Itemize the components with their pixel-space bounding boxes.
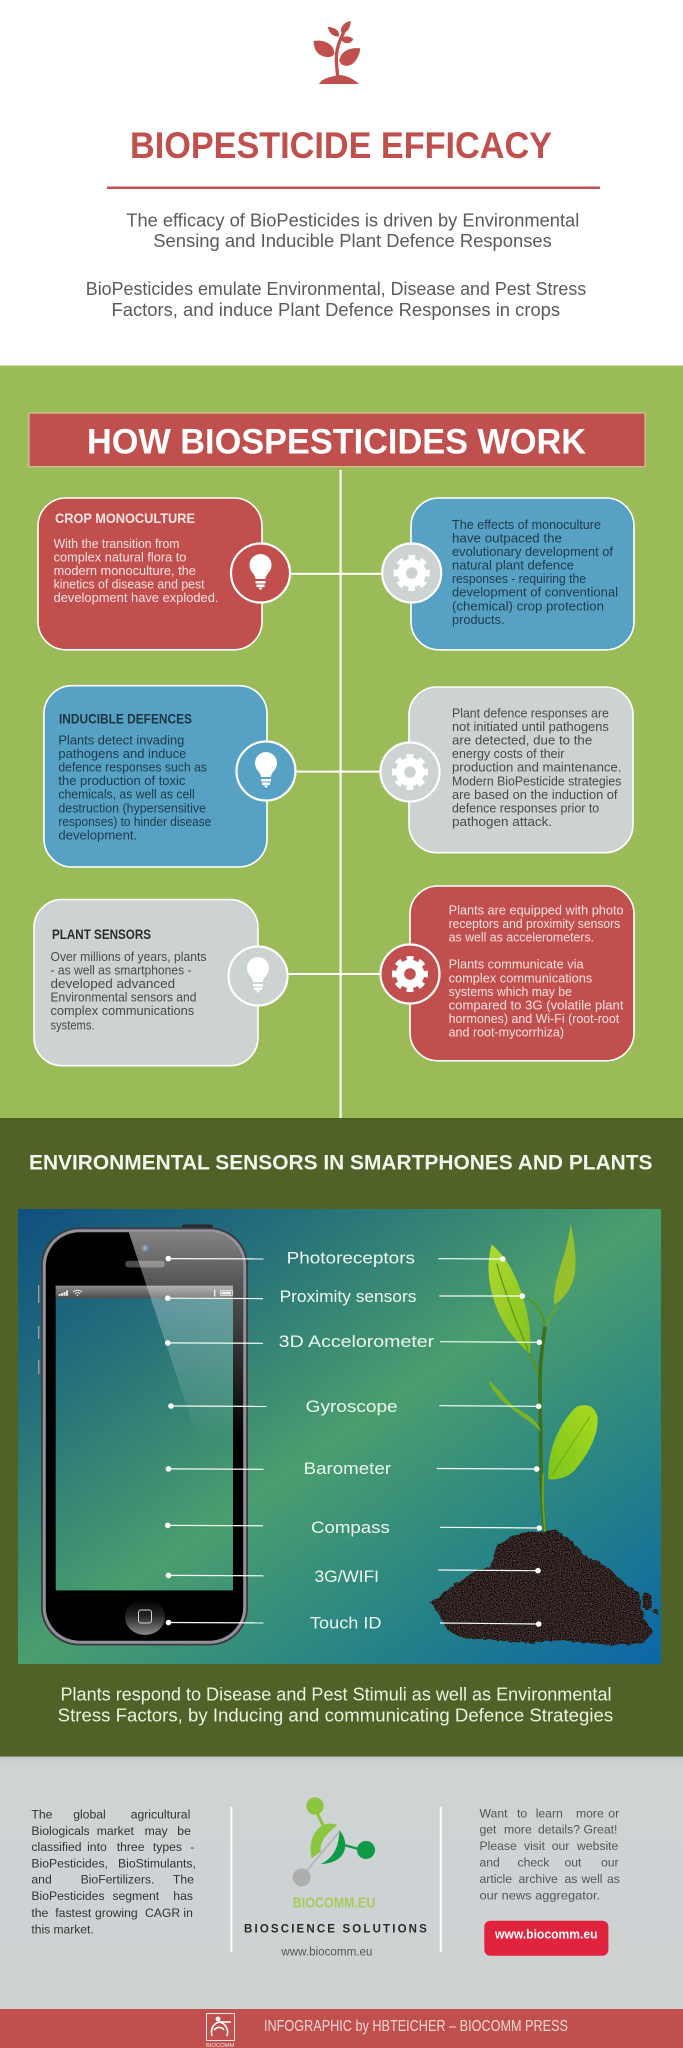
body text: kinetics of disease and pest [54, 578, 205, 592]
text block: call to action: well [580, 1872, 602, 1886]
card: plant defence responses: Modern BioPesticide strategies [452, 775, 621, 789]
text block: call to action: as [564, 1872, 577, 1886]
page background [0, 0, 683, 366]
smartphone illustration [38, 1224, 250, 1646]
body text: chemicals, as well as cell [58, 787, 195, 801]
panel: how biopesticides work [0, 366, 683, 1118]
icon: bulb on blue circle [236, 742, 296, 800]
card: crop monoculture [38, 498, 262, 650]
sensor leader lines: plant side [437, 1256, 542, 1627]
plant illustration [430, 1224, 658, 1645]
sensor labels [279, 1249, 435, 1633]
card: plant defence responses: production and maintenance. [452, 760, 621, 774]
intro text block [86, 210, 586, 320]
card: monoculture effects: development of conventional [452, 586, 618, 600]
text block: market: BioPesticides [31, 1889, 105, 1903]
body text: developed advanced [50, 977, 175, 991]
logo wordmark: BIOCOMM.EU [293, 1894, 375, 1911]
card: monoculture effects: evolutionary development of [452, 545, 614, 559]
text block: market: The [31, 1807, 53, 1821]
body text: complex natural flora to [54, 551, 186, 565]
text block: call to action: article [480, 1872, 512, 1886]
text block: call to action: learn [536, 1806, 563, 1820]
intro text block: Sensing and Inducible Plant Defence Responses [153, 231, 552, 251]
text block: call to action: more [504, 1823, 532, 1837]
logo: biocomm [293, 1797, 375, 1886]
title: BIOPESTICIDE EFFICACY [130, 125, 552, 166]
body text: modern monoculture, the [54, 564, 196, 578]
text block: call to action: check [518, 1856, 550, 1870]
caption: Stress Factors, by Inducing and communicating Defence Strategies [58, 1706, 613, 1726]
sensor labels: Touch ID [310, 1614, 382, 1633]
card: monoculture effects: have outpaced the [452, 531, 562, 545]
sensor leader lines: smartphone side [165, 1256, 266, 1625]
text block: call to action: more [576, 1806, 604, 1820]
banner: HOW BIOSPESTICIDES WORK [87, 422, 586, 461]
card: plant defence responses: Plant defence responses are [452, 707, 609, 721]
soil mound [430, 1530, 658, 1645]
card: monoculture effects: (chemical) crop protection [452, 600, 604, 614]
sensor labels: Barometer [304, 1459, 391, 1478]
website: www.biocomm.eu [280, 1946, 372, 1958]
text block: market: fastest [55, 1906, 92, 1920]
card: monoculture effects: The effects of monoculture [452, 518, 601, 532]
body text: Plants detect invading [58, 734, 184, 748]
text block: call to action: out [564, 1856, 582, 1870]
heading: crop monoculture: CROP MONOCULTURE [55, 510, 195, 526]
sensor labels: 3G/WIFI [314, 1567, 379, 1586]
body text: development have exploded. [54, 591, 218, 605]
text block: market: may [145, 1824, 169, 1838]
text block: market: has [173, 1889, 193, 1903]
card: monoculture effects [411, 498, 634, 650]
caption: Plants respond to Disease and Pest Stimuli as well as Environmental [60, 1685, 612, 1705]
text block: call to action: our [601, 1856, 619, 1870]
icon: gear on grey circle [380, 742, 440, 802]
speaker [125, 1261, 165, 1268]
panel: environmental sensors [0, 1118, 683, 1757]
body text: destruction (hypersensitive [58, 802, 206, 816]
tagline: BIOSCIENCE SOLUTIONS [244, 1923, 427, 1935]
card: plant communication: hormones) and Wi-Fi (root-root [449, 1012, 620, 1026]
leaf top left [489, 1244, 530, 1353]
card: plant defence responses [409, 687, 633, 853]
card: plant defence responses: are detected, due to the [452, 734, 592, 748]
body text [54, 537, 218, 605]
card: plant defence responses: defence responses prior to [452, 802, 599, 816]
body text: - as well as smartphones - [50, 964, 192, 978]
text block: call to action: website [576, 1839, 619, 1853]
body text: complex communications [50, 1004, 194, 1018]
body text: defence responses such as [58, 760, 207, 774]
text block: call to action: Please [480, 1839, 517, 1853]
card: plant sensors [34, 900, 258, 1066]
card: inducible defences [44, 686, 267, 867]
text block: call to action: as [607, 1872, 620, 1886]
phone screen [56, 1286, 233, 1590]
text block: call to action: to [517, 1806, 527, 1820]
card: plant communication: as well as accelerometers. [449, 931, 594, 945]
gradient image panel [18, 1209, 661, 1664]
text block: market: three [117, 1840, 145, 1854]
screen gloss [128, 1232, 244, 1424]
intro text block: Factors, and induce Plant Defence Responses in crops [112, 300, 560, 320]
card: monoculture effects: responses - requiring the [452, 572, 586, 586]
icon: seedling [314, 21, 360, 84]
card: plant communication: and root-mycorrhiza) [449, 1026, 564, 1040]
section heading: ENVIRONMENTAL SENSORS IN SMARTPHONES AND PLANTS [29, 1150, 652, 1174]
text block: market: market [97, 1824, 135, 1838]
card: plant defence responses: not initiated until pathogens [452, 720, 609, 734]
body text: Environmental sensors and [50, 991, 196, 1005]
body text: responses) to hinder disease [58, 815, 211, 829]
text block: market: Biologicals [31, 1824, 90, 1838]
text block: market: types [153, 1840, 182, 1854]
icon: bulb on grey circle [228, 946, 288, 1006]
text block: call to action: our news aggregator. [480, 1888, 600, 1902]
body text: pathogens and induce [58, 747, 186, 761]
status bar [56, 1286, 233, 1298]
text block: market: The [173, 1873, 194, 1887]
text block: market: and [31, 1873, 52, 1887]
card: plant communication: receptors and proximity sensors [449, 917, 620, 931]
sensor labels: Proximity sensors [280, 1287, 416, 1306]
text block: call to action: archive [518, 1872, 558, 1886]
text block: market: BioStimulants, [118, 1856, 196, 1870]
icon: gear on red circle [380, 944, 440, 1004]
body text: systems. [50, 1018, 94, 1032]
sensor labels: Compass [311, 1518, 390, 1537]
card: monoculture effects: products. [452, 613, 504, 627]
banner [29, 413, 645, 467]
home button [125, 1599, 165, 1635]
text block: market: growing [95, 1906, 138, 1920]
text block: market [31, 1807, 196, 1936]
body text: With the transition from [54, 537, 180, 551]
text block: market: this market. [31, 1922, 94, 1936]
text block: market: into [87, 1840, 107, 1854]
leaf top right [554, 1224, 576, 1305]
icon: bulb on red circle [231, 544, 290, 602]
body text: the production of toxic [58, 774, 185, 788]
text block: market: classified [31, 1840, 82, 1854]
text block: call to action: our [552, 1839, 569, 1853]
card: plant defence responses: are based on the induction of [452, 788, 618, 802]
button: website: www.biocomm.eu [494, 1926, 598, 1941]
text block: market: global [73, 1807, 106, 1821]
card: plant communication: compared to 3G (volatile plant [449, 998, 624, 1012]
text block: market: be [177, 1824, 191, 1838]
text block: call to action: get [480, 1823, 497, 1837]
text block: market: BioFertilizers. [81, 1873, 154, 1887]
intro text block: BioPesticides emulate Environmental, Disease and Pest Stress [86, 279, 586, 299]
button: website [484, 1921, 608, 1956]
text block: market: the [31, 1906, 49, 1920]
text block: market: agricultural [131, 1807, 190, 1821]
leaf lower right [548, 1405, 598, 1479]
stem [540, 1327, 545, 1532]
card: monoculture effects: natural plant defence [452, 558, 574, 572]
footer logo [206, 2014, 235, 2048]
title underline [107, 186, 600, 189]
body text: development. [58, 829, 137, 843]
text block: market: segment [112, 1889, 160, 1903]
panel: about biocomm [0, 1757, 683, 2009]
camera [141, 1245, 149, 1252]
heading: plant sensors: PLANT SENSORS [52, 926, 151, 942]
body text: Over millions of years, plants [50, 950, 206, 964]
text block: call to action [480, 1806, 620, 1902]
card: plant communication: Plants are equipped with photo [449, 904, 624, 918]
heading: inducible defences: INDUCIBLE DEFENCES [59, 710, 192, 726]
text block: market: in [183, 1906, 193, 1920]
text block: call to action: or [608, 1806, 619, 1820]
footer [0, 2009, 683, 2048]
leaf small left [488, 1381, 541, 1432]
text block: market: BioPesticides, [31, 1856, 108, 1870]
text block: market: - [190, 1840, 194, 1854]
text block: call to action: Great! [584, 1823, 617, 1837]
sensor labels: Photoreceptors [287, 1249, 415, 1268]
card: plant communication: systems which may be [449, 985, 572, 999]
icon: gear on grey circle [382, 544, 441, 602]
card: plant defence responses: energy costs of their [452, 747, 564, 761]
caption [58, 1685, 613, 1726]
text block: call to action: details? [538, 1823, 580, 1837]
sensor labels: 3D Accelorometer [279, 1332, 435, 1351]
body text [50, 950, 206, 1032]
card: plant communication: Plants communicate via [449, 958, 584, 972]
footer credit: INFOGRAPHIC by HBTEICHER – BIOCOMM PRESS [264, 2018, 568, 2035]
sensor labels: Gyroscope [306, 1397, 398, 1416]
card: plant defence responses: pathogen attack. [452, 815, 552, 829]
text block: call to action: Want [480, 1806, 508, 1820]
body text [58, 734, 211, 843]
text block: call to action: visit [524, 1839, 546, 1853]
card: plant communication: complex communications [449, 971, 592, 985]
text block: market: CAGR [145, 1906, 180, 1920]
intro text block: The efficacy of BioPesticides is driven by Environmental [126, 210, 579, 230]
text block: call to action: and [480, 1856, 500, 1870]
card: plant communication [410, 886, 634, 1061]
